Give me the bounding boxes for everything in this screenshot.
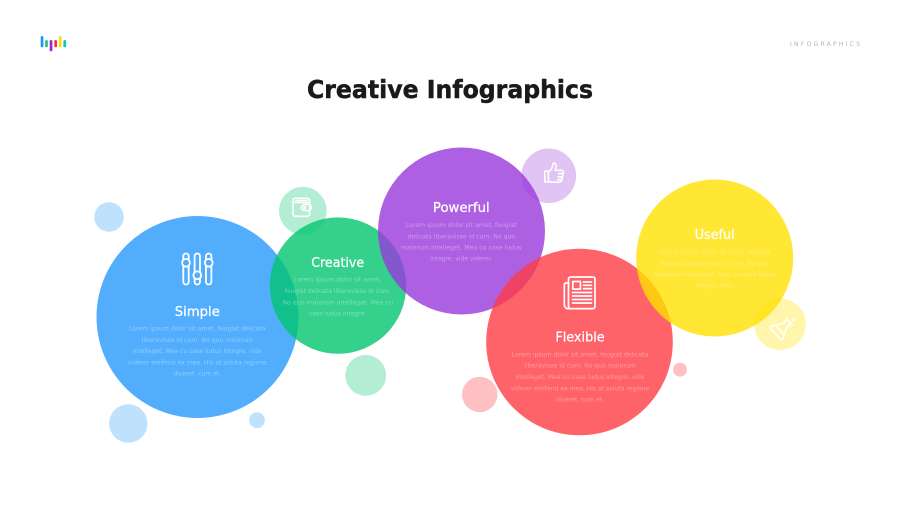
bubble: blue bottom left: [109, 404, 148, 443]
icon bubble: wallet: [279, 187, 327, 234]
text: useful body: integre, vide.: [695, 283, 734, 290]
icon: newspaper: [564, 277, 595, 309]
text: useful body: Lorem ipsum dolor sit amet, feugiat: [659, 249, 771, 256]
bubble: red tiny: [673, 363, 687, 377]
bubble: red bottom left: [462, 377, 497, 412]
circle: flexible: [486, 249, 673, 435]
panel: useful: [636, 180, 793, 336]
heading: simple: Simple: [175, 305, 220, 320]
text: flexible body: Lorem ipsum dolor sit amet, feugiat delicata: [512, 351, 648, 358]
text: simple body: [128, 325, 267, 378]
text: creative body: No quo maiorum intelleget. Mea cu: [282, 299, 393, 306]
text: useful body: delicata liberavisse id cum. No quo: [661, 260, 769, 267]
circle: powerful: [378, 148, 545, 314]
heading: creative: Creative: [311, 256, 364, 271]
bubble: green bottom: [345, 355, 386, 396]
text: simple body: diceret, cum et.: [173, 371, 221, 378]
text: powerful body: delicata liberavisse id cum. No quo: [407, 233, 515, 240]
text: powerful body: maiorum intelleget. Mea cu case ludus: [401, 245, 521, 252]
text: flexible body: [511, 351, 649, 404]
text: useful body: maiorum intelleget. Mea cu case ludus: [654, 272, 775, 279]
text: flexible body: viderer eleifend ex mea. His at soluta regione: [511, 385, 649, 392]
panel: simple: [96, 216, 298, 418]
text: creative body: feugiat delicata liberavisse id cum.: [285, 288, 391, 295]
bubble: blue tiny: [249, 412, 265, 428]
text: flexible body: intelleget. Mea cu case ludus integre, vide: [515, 374, 645, 381]
heading: powerful: Powerful: [433, 201, 490, 216]
circle: simple: [96, 216, 298, 418]
text: creative body: case ludus integre.: [309, 310, 366, 317]
heading: useful: Useful: [695, 228, 735, 243]
panel: powerful: [378, 148, 545, 314]
text: creative body: [282, 277, 393, 317]
heading: flexible: Flexible: [555, 331, 605, 346]
text: simple body: viderer eleifend ex mea. His at soluta regione: [128, 359, 267, 366]
circle: creative: [270, 217, 406, 354]
header label: INFOGRAPHICS: [790, 41, 860, 48]
text: useful body: [654, 249, 775, 290]
text: simple body: intelleget. Mea cu case ludus integre, vide: [133, 348, 262, 355]
text: powerful body: Lorem ipsum dolor sit amet, feugiat: [406, 222, 517, 229]
text: powerful body: [401, 222, 521, 263]
circle: useful: [636, 180, 793, 336]
title: Creative Infographics: [307, 75, 593, 104]
panel: creative: [270, 217, 406, 354]
logo: [41, 36, 66, 51]
icon: sliders: [182, 254, 213, 284]
text: creative body: Lorem ipsum dolor sit amet,: [294, 277, 381, 284]
text: flexible body: liberavisse id cum. No quo maiorum: [524, 363, 636, 370]
icon bubble: thumbs up: [522, 148, 576, 203]
panel: flexible: [486, 249, 673, 435]
text: powerful body: integre, vide viderer.: [430, 256, 492, 263]
text: simple body: liberavisse id cum. No quo maiorum: [142, 337, 253, 344]
text: simple body: Lorem ipsum dolor sit amet, feugiat delicata: [129, 325, 266, 332]
icon bubble: flask: [754, 298, 806, 350]
bubble: blue top left: [94, 202, 124, 232]
text: flexible body: diceret, cum et.: [556, 397, 604, 404]
